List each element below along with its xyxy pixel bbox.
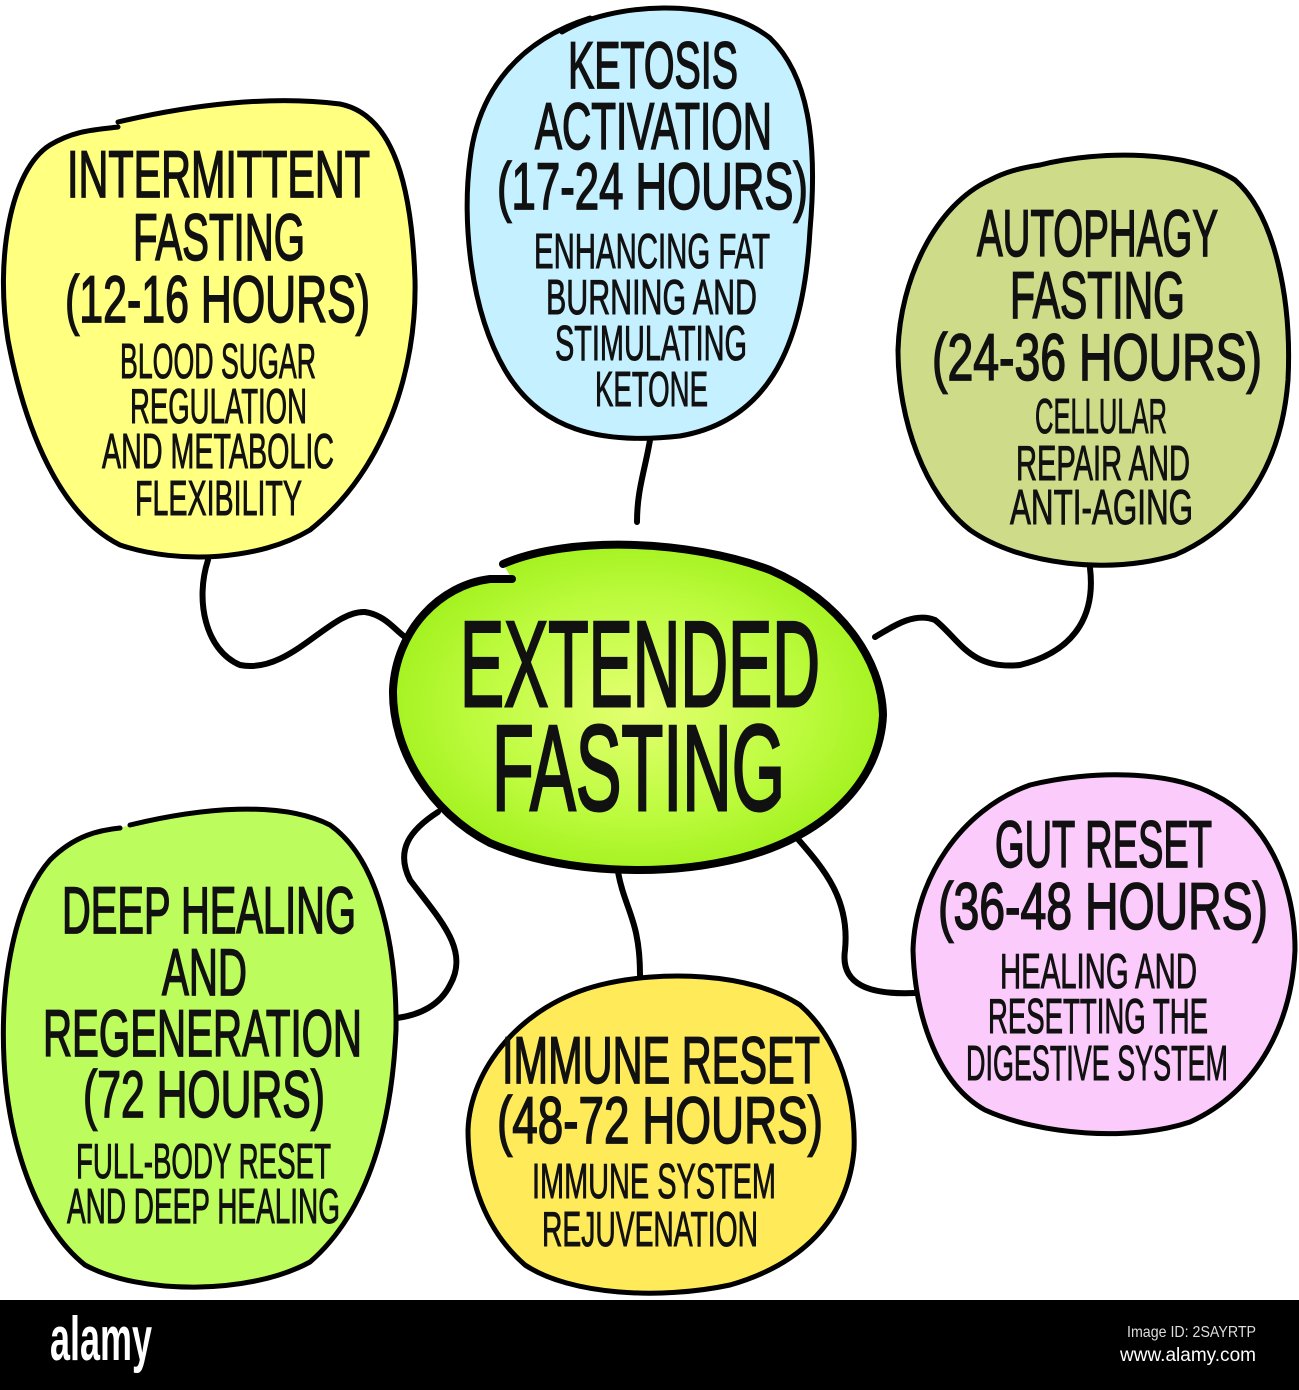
heading: DEEP HEALING xyxy=(62,873,356,947)
description: KETONE xyxy=(595,363,708,417)
website: www.alamy.com xyxy=(1119,1345,1256,1366)
panel: intermittent fasting xyxy=(3,101,415,557)
heading xyxy=(932,196,1262,394)
description: BLOOD SUGAR xyxy=(120,335,316,389)
description: ANTI-AGING xyxy=(1010,481,1193,535)
heading: (17-24 HOURS) xyxy=(497,149,808,223)
heading xyxy=(497,28,808,223)
description: STIMULATING xyxy=(555,317,747,371)
description: REJUVENATION xyxy=(542,1203,758,1257)
image id: Image ID: 2SAYRTP xyxy=(1127,1324,1256,1341)
connector: deep healing to center xyxy=(397,812,456,1018)
heading xyxy=(938,807,1268,943)
panel: central topic xyxy=(393,545,883,870)
heading: FASTING xyxy=(1010,258,1185,332)
heading: INTERMITTENT xyxy=(67,137,370,211)
connector: immune reset to center xyxy=(618,872,640,975)
heading: (12-16 HOURS) xyxy=(65,262,370,336)
description: AND METABOLIC xyxy=(102,425,334,479)
description xyxy=(102,335,334,526)
footer logo: alamy xyxy=(50,1305,152,1374)
heading: IMMUNE RESET xyxy=(502,1023,820,1097)
heading xyxy=(65,137,370,336)
heading: ACTIVATION xyxy=(535,89,772,163)
heading: (48-72 HOURS) xyxy=(497,1083,823,1157)
description: BURNING AND xyxy=(546,271,757,325)
connector: gut reset to center xyxy=(797,838,915,993)
heading: AND xyxy=(162,935,247,1009)
heading xyxy=(497,1023,823,1157)
description: IMMUNE SYSTEM xyxy=(532,1155,776,1209)
description xyxy=(532,1155,776,1257)
description: FULL-BODY RESET xyxy=(76,1135,331,1189)
description xyxy=(966,945,1228,1091)
description: FLEXIBILITY xyxy=(135,472,302,526)
heading: KETOSIS xyxy=(568,28,738,102)
heading: FASTING xyxy=(133,200,305,274)
connector: ketosis to center xyxy=(637,440,650,522)
title: FASTING xyxy=(492,700,785,836)
panel: immune reset xyxy=(468,976,854,1293)
description: REGULATION xyxy=(130,380,307,434)
footer bar xyxy=(0,1300,1299,1390)
heading: REGENERATION xyxy=(43,996,362,1070)
heading xyxy=(43,873,362,1131)
connector: autophagy to center xyxy=(875,568,1091,666)
panel: gut reset xyxy=(913,775,1295,1134)
heading: (72 HOURS) xyxy=(83,1057,325,1131)
panel: autophagy fasting xyxy=(898,155,1289,565)
connector: intermittent fasting to center xyxy=(203,560,405,666)
description: ENHANCING FAT xyxy=(534,225,770,279)
description: AND DEEP HEALING xyxy=(67,1180,340,1234)
title: EXTENDED xyxy=(460,596,820,732)
panel: deep healing and regeneration xyxy=(3,809,396,1287)
description xyxy=(67,1135,340,1234)
description xyxy=(1010,390,1193,535)
title xyxy=(460,596,820,836)
description xyxy=(534,225,770,417)
description: CELLULAR xyxy=(1035,390,1167,444)
panel: ketosis activation xyxy=(467,8,813,438)
